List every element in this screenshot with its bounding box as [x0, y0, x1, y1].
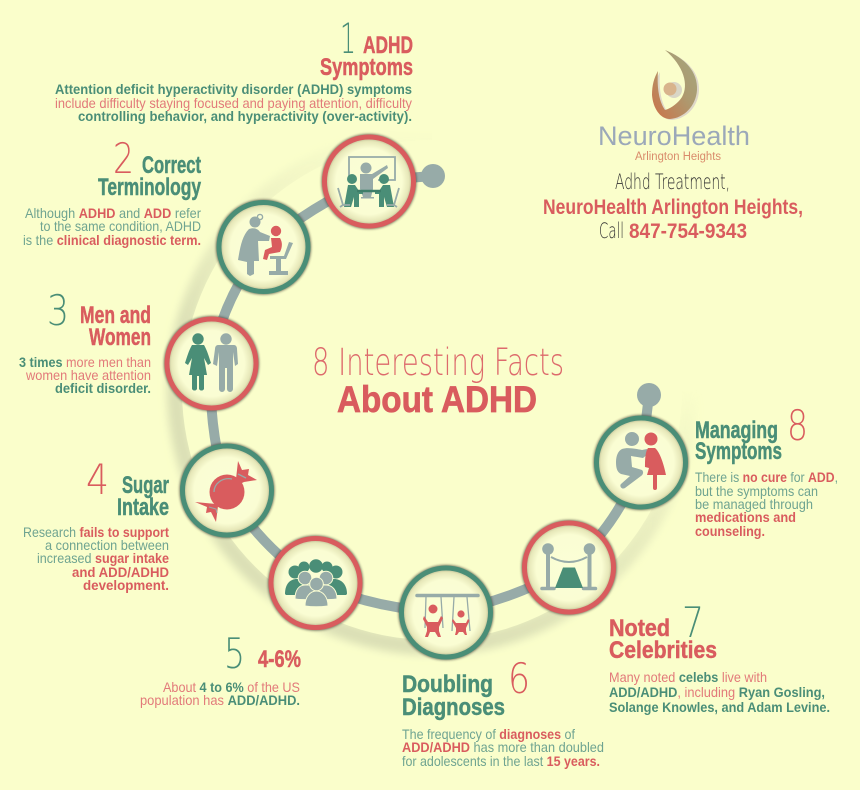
fact 8: managing symptoms: [695, 401, 838, 539]
title: [312, 341, 564, 420]
title: About ADHD: [337, 379, 537, 420]
fact 7: noted celebrities: Noted: [609, 615, 670, 642]
fact 6: doubling diagnoses: ADD/ADHD has more than doubled: [402, 739, 604, 755]
fact 8: managing symptoms: 8: [787, 401, 808, 450]
fact 2: correct terminology: 2: [113, 134, 134, 183]
path end node: [637, 383, 661, 407]
fact 6: doubling diagnoses: 6: [508, 654, 530, 703]
circle 3: man and woman icon: [164, 316, 259, 411]
contact text: Call: [599, 219, 624, 243]
fact 1: ADHD symptoms: ADHD: [363, 32, 413, 59]
circle 5: crowd icon: [268, 536, 363, 630]
fact 4: sugar intake: Intake: [117, 494, 169, 521]
fact 2: correct terminology: is the clinical diagnostic term.: [23, 232, 201, 248]
fact 3: men and women: deficit disorder.: [55, 380, 151, 396]
contact text: 847-754-9343: [629, 220, 747, 243]
contact text: Adhd Treatment,: [615, 170, 730, 194]
circle 1: classroom icon: [322, 134, 416, 229]
fact 7: noted celebrities: [609, 598, 830, 715]
fact 4: sugar intake: and ADD/ADHD: [72, 564, 169, 580]
fact 1: ADHD symptoms: controlling behavior, and hyperactivity (over-activity).: [78, 108, 412, 124]
fact 4: sugar intake: development.: [83, 577, 169, 593]
fact 4: sugar intake: increased sugar intake: [37, 550, 169, 566]
fact 8: managing symptoms: be managed through: [695, 496, 813, 512]
fact 8: managing symptoms: Symptoms: [695, 438, 782, 465]
fact 1: ADHD symptoms: include difficulty staying focused and paying attention, difficulty: [55, 95, 412, 111]
fact 1: ADHD symptoms: 1: [340, 14, 356, 63]
contact text: [543, 170, 803, 243]
circle 8: adult and child icon: [594, 415, 688, 510]
fact 6: doubling diagnoses: The frequency of diagnoses of: [402, 726, 575, 742]
fact 4: sugar intake: Research fails to support: [23, 524, 169, 540]
fact 5: 4-6%: [140, 629, 301, 708]
fact 2: correct terminology: Although ADHD and ADD refer: [25, 205, 201, 221]
circle 6: swings icon: [398, 565, 494, 660]
circle 7: velvet rope icon: [522, 520, 616, 615]
fact 6: doubling diagnoses: Diagnoses: [402, 694, 505, 721]
fact 3: men and women: women have attention: [25, 367, 151, 383]
fact 8: managing symptoms: There is no cure for ADD,: [695, 469, 838, 485]
title: 8 Interesting Facts: [312, 341, 564, 384]
contact text: NeuroHealth Arlington Heights,: [543, 196, 803, 219]
fact 6: doubling diagnoses: [402, 654, 604, 769]
fact 2: correct terminology: to the same condition, ADHD: [40, 218, 201, 234]
fact 3: men and women: Men and: [80, 302, 151, 329]
fact 2: correct terminology: Correct: [142, 152, 201, 179]
fact 7: noted celebrities: Celebrities: [609, 637, 717, 664]
fact 7: noted celebrities: ADD/ADHD, including Ryan Gosling,: [609, 684, 825, 700]
fact 3: men and women: 3: [47, 286, 69, 335]
connecting path: [211, 176, 649, 612]
fact 5: 4-6%: 5: [224, 629, 245, 678]
fact 6: doubling diagnoses: Doubling: [402, 671, 493, 698]
fact 4: sugar intake: 4: [86, 455, 109, 504]
fact 2: correct terminology: [23, 134, 201, 248]
logo: NeuroHealth: [598, 50, 750, 163]
path start node: [421, 164, 445, 188]
fact 4: sugar intake: Sugar: [122, 472, 169, 499]
fact 7: noted celebrities: 7: [682, 598, 704, 647]
fact 6: doubling diagnoses: for adolescents in the last 15 years.: [402, 753, 600, 769]
fact 1: ADHD symptoms: Attention deficit hyperactivity disorder (ADHD) symptoms: [55, 81, 412, 97]
fact 5: 4-6%: 4-6%: [258, 646, 301, 673]
fact 8: managing symptoms: medications and: [695, 509, 796, 525]
fact 8: managing symptoms: counseling.: [695, 523, 765, 539]
circle 2: doctor and child icon: [216, 200, 311, 294]
fact 8: managing symptoms: but the symptoms can: [695, 483, 818, 499]
fact 3: men and women: [19, 286, 151, 396]
fact 4: sugar intake: [23, 455, 169, 593]
logo: NeuroHealth: Arlington Heights: [635, 151, 721, 163]
fact 2: correct terminology: Terminology: [98, 174, 201, 201]
fact 8: managing symptoms: Managing: [695, 417, 778, 444]
fact 5: 4-6%: population has ADD/ADHD.: [140, 692, 300, 708]
fact 4: sugar intake: a connection between: [45, 537, 169, 553]
fact 1: ADHD symptoms: [55, 14, 413, 124]
logo: NeuroHealth: NeuroHealth: [598, 121, 750, 151]
fact 3: men and women: Women: [89, 324, 151, 351]
fact 5: 4-6%: About 4 to 6% of the US: [163, 679, 300, 695]
fact 1: ADHD symptoms: Symptoms: [320, 54, 413, 81]
fact 7: noted celebrities: Many noted celebs live with: [609, 669, 767, 685]
circle 4: candy icon: [180, 443, 274, 538]
fact 3: men and women: 3 times more men than: [19, 354, 151, 370]
fact 7: noted celebrities: Solange Knowles, and Adam Levine.: [609, 699, 830, 715]
